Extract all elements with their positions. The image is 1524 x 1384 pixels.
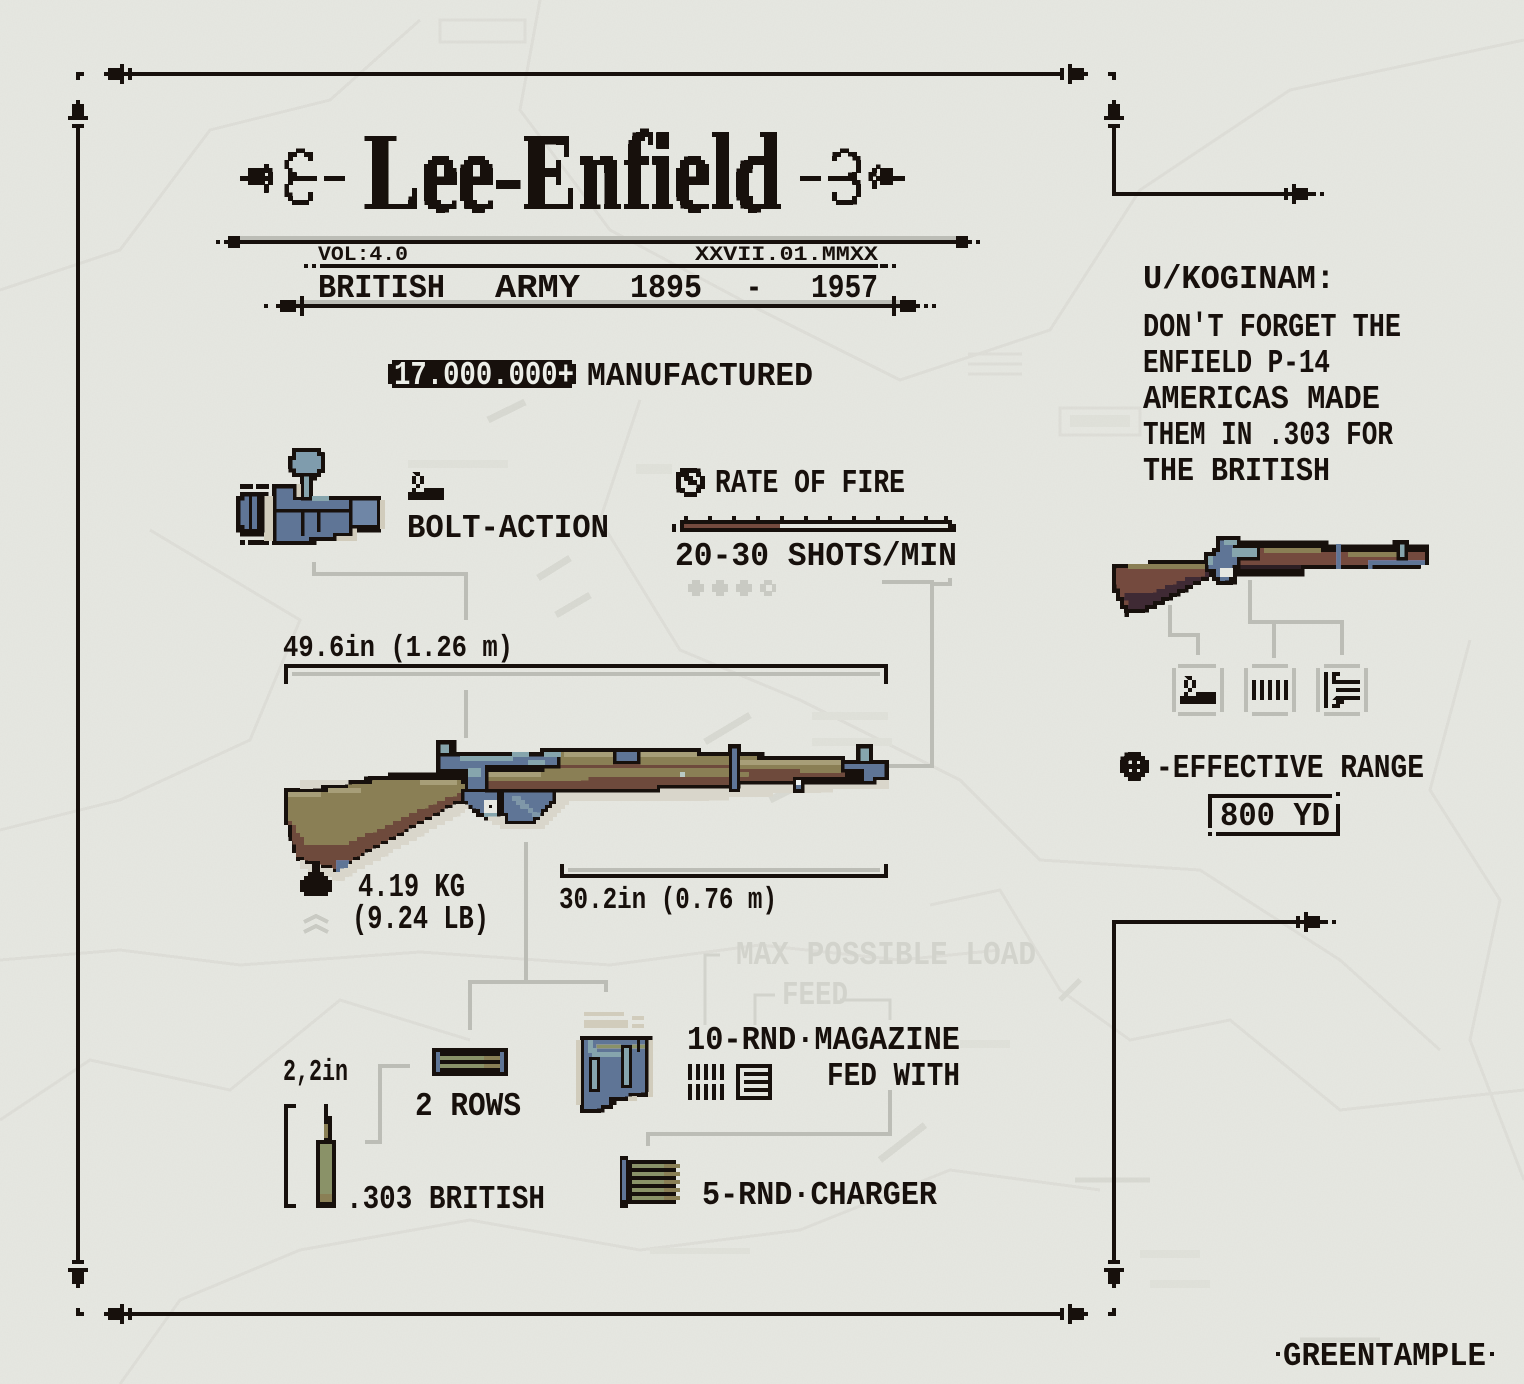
header rules and meta: - [746,270,762,307]
faded glyph [304,916,328,932]
manufactured count [388,357,813,395]
receiver and furniture [440,744,885,790]
stock [287,777,470,874]
metal parts [1208,540,1258,582]
overall length dimension: 49.6in (1.26 m) [283,631,513,666]
box: bolt action [1174,666,1222,714]
comment panel: u/koginam: ENFIELD P-14 [1143,345,1330,382]
gauge: shots per minute [672,516,956,532]
icon: clock [678,470,702,494]
service line: BRITISH [318,270,445,307]
icon: charger clip [620,1156,680,1208]
title ornament right [802,152,903,203]
charger: 5-RND·CHARGER [702,1177,937,1214]
icon: two row stack [432,1048,508,1076]
signature: GREENTAMPLE [1283,1338,1486,1375]
title block [240,111,903,235]
icon: crosshair [1122,754,1146,778]
weight: 4.19 KG [358,869,465,906]
right horizontal arrow heads [1284,184,1336,932]
faint label: max possible load feed: FEED [782,977,848,1014]
charger [620,1156,937,1214]
title ornament left [240,152,344,203]
box: sights [1318,666,1366,714]
comment panel: u/koginam: U/KOGINAM: [1143,261,1335,298]
bottom-right horizontal arrow [1060,1304,1088,1324]
header rules and meta: 1957 [811,270,878,307]
ten round magazine label [687,1022,960,1100]
rate of fire [672,465,957,596]
faded rating dots [688,580,776,596]
ammunition: .303 British [283,1055,545,1218]
top-right horizontal arrow [1060,64,1088,84]
corner ticks [76,72,1116,1316]
comment panel: u/koginam: THEM IN .303 FOR [1143,417,1393,454]
comment panel: u/koginam: AMERICAS MADE [1143,381,1380,418]
bolt-action label: BOLT-ACTION [407,510,609,547]
icon: cartridge [316,1104,336,1208]
manufactured count: 17.000.000+ [394,357,574,394]
icon: magazine [576,1036,652,1110]
magazine and trigger guard [464,788,553,822]
bolt-action label [407,472,609,547]
effective range: -EFFECTIVE RANGE [1156,750,1424,787]
ten round magazine label: 10-RND·MAGAZINE [687,1022,960,1059]
overall length dimension [283,631,886,684]
two rows [415,1048,521,1125]
barrel [1232,545,1426,572]
header rules and meta: ARMY [495,270,580,307]
ammunition: .303 British: 2,2in [283,1055,348,1090]
value box: 800 YD [1220,798,1330,835]
header rules and meta [216,236,980,316]
rifle shadow [300,780,888,880]
bottom-left horizontal arrow [104,1304,132,1324]
right vertical arrow heads [1104,100,1124,1288]
effective range [1122,750,1424,836]
rate of fire: RATE OF FIRE [715,465,905,502]
top-left horizontal arrow [104,64,132,84]
stock [1114,562,1210,612]
bracket [286,1106,296,1206]
header rules and meta: 1895 [630,270,702,307]
ornamental frame [68,64,1336,1324]
comment panel: u/koginam: DON'T FORGET THE [1143,309,1401,346]
barrel length dimension [559,864,886,918]
ten round magazine label: FED WITH [827,1058,960,1095]
two rows: 2 ROWS [415,1088,521,1125]
icon: magazine glyph [736,1064,772,1100]
faint label: max possible load feed [705,937,1036,1025]
rifle: Lee-Enfield main illustration [287,744,888,880]
volume: VOL:4.0 [318,244,408,267]
icon: rounds [688,1064,724,1100]
connector lines [314,562,1342,1146]
faint label: max possible load feed: MAX POSSIBLE LOAD [736,937,1036,974]
left vertical arrow heads [68,100,88,1288]
manufactured count: MANUFACTURED [587,358,813,395]
weight: (9.24 LB) [352,901,489,938]
title: Lee-Enfield: Lee-Enfield [365,111,780,235]
fore-end [486,750,848,792]
comment panel: u/koginam: THE BRITISH [1143,453,1330,490]
date: XXVII.01.MMXX [695,244,878,267]
icon: bolt action glyph [408,472,444,500]
icon: rifle bolt [240,450,384,544]
barrel length dimension: 30.2in (0.76 m) [559,883,777,918]
faded magazine lines [584,1012,644,1028]
comment panel: u/koginam [1143,261,1401,490]
icon: weight [300,864,332,896]
magazine [576,1012,652,1110]
icon boxes: rifle features [1174,666,1366,714]
box: rounds [1246,666,1294,714]
rate of fire: 20-30 SHOTS/MIN [675,538,957,575]
weight [300,864,489,938]
rifle: Enfield P-14 [1114,540,1426,612]
ammunition: .303 British: .303 BRITISH [346,1181,545,1218]
